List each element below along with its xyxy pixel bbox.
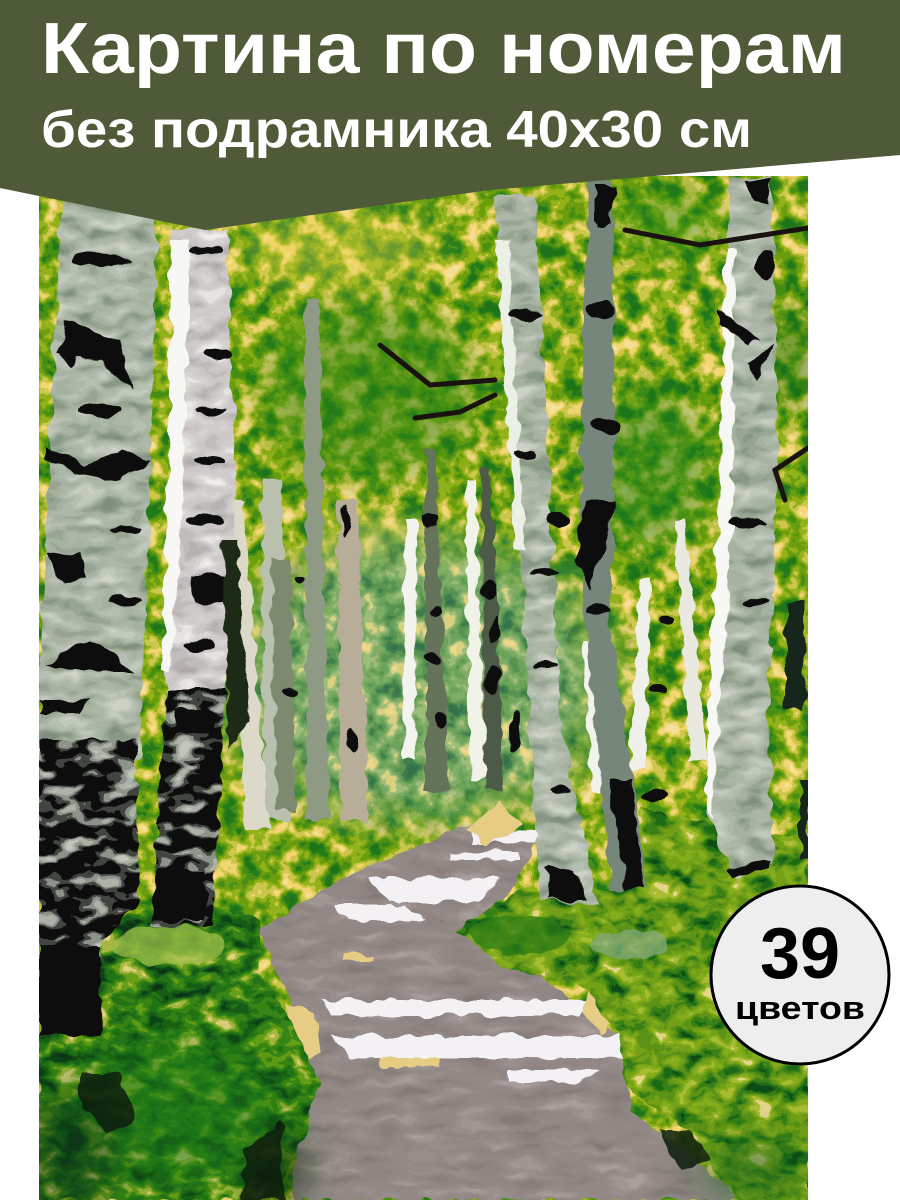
colours label: цветов — [735, 990, 865, 1026]
dark undergrowth shadow — [80, 1075, 710, 1200]
deep green grass shade — [20, 1040, 800, 1200]
yellow sunlit foliage — [240, 210, 440, 610]
title: Картина по номерам — [41, 9, 846, 89]
trunk marks: centre birches — [510, 185, 645, 900]
number of colours: 39 — [760, 914, 840, 994]
grass tone patches — [115, 915, 670, 965]
right grass — [450, 800, 808, 1200]
upper green foliage masses — [260, 190, 818, 550]
colour count badge — [711, 886, 889, 1064]
trunk: right birch — [704, 176, 780, 880]
trunk: second birch — [161, 228, 238, 691]
branches — [380, 228, 808, 500]
yellow light on path edges — [285, 800, 620, 1066]
trunk marks: large left birch — [39, 254, 150, 714]
header banner — [0, 0, 900, 230]
trunk marks: right birch — [720, 180, 775, 878]
trunk marks: second birch — [153, 246, 249, 920]
painting: birch forest path — [20, 176, 818, 1200]
trunk: left birch lower dark section — [39, 730, 149, 1035]
left foreground grass — [39, 905, 322, 1200]
forest canopy foliage — [39, 176, 808, 1200]
distant thin birch trunks — [230, 300, 707, 830]
path ground — [260, 824, 736, 1200]
subtitle: без подрамника 40х30 см — [41, 101, 752, 159]
far right dark trunk edge — [785, 600, 808, 860]
trunk: dark birch — [580, 180, 648, 890]
trunk: large left birch — [39, 200, 160, 761]
light patches on path — [320, 830, 640, 1082]
trunk: second birch lower section — [150, 687, 228, 928]
trunk: centre birch — [490, 190, 605, 910]
black marks on thin trunks — [284, 504, 671, 801]
mid forest haze — [221, 514, 638, 847]
